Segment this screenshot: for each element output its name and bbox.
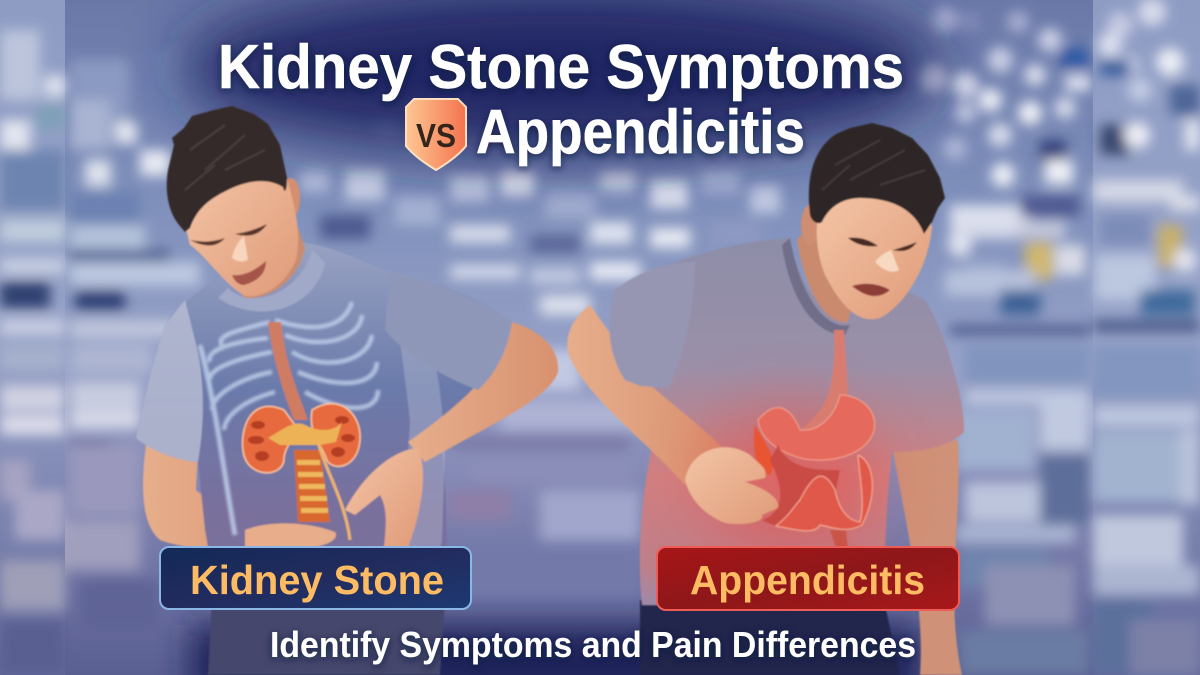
- bent right arm: [408, 318, 558, 462]
- title line 2: Appendicitis: [476, 98, 805, 167]
- person: kidney stone patient: [136, 106, 558, 675]
- shirt highlights: [136, 300, 445, 600]
- left arm: [143, 445, 335, 551]
- subtitle: Identify Symptoms and Pain Differences: [270, 624, 916, 665]
- hair: [809, 123, 945, 234]
- spine band: [268, 322, 308, 420]
- neck: [797, 215, 855, 322]
- face: [185, 169, 298, 296]
- torso shirt: [136, 242, 512, 605]
- right arm: [893, 440, 962, 675]
- forearm: [567, 305, 725, 485]
- colon and appendix: [754, 425, 872, 548]
- neck: [228, 205, 305, 298]
- sleeve: [385, 272, 512, 390]
- label: appendicitis: Appendicitis: [690, 557, 925, 603]
- trousers: [640, 600, 900, 675]
- collar: [782, 238, 850, 335]
- eyes, nose, mouth: [190, 224, 267, 285]
- red pain glow: [700, 405, 880, 555]
- oesophagus: [800, 330, 848, 430]
- hair strands: [185, 125, 265, 190]
- person: appendicitis patient: [567, 123, 964, 675]
- label: appendicitis: [657, 547, 959, 610]
- label: kidney stone: Kidney Stone: [190, 557, 444, 603]
- hand on flank: [345, 448, 423, 548]
- hair: [167, 106, 287, 232]
- kidneys and ureters: [242, 404, 360, 540]
- ear: [282, 178, 300, 218]
- hair strands: [822, 140, 925, 190]
- icon: vs shield badge: [406, 99, 466, 170]
- face: [817, 197, 932, 319]
- title backdrop glow: [180, 0, 940, 155]
- left side strip: [0, 0, 65, 675]
- label: kidney stone: [160, 547, 471, 609]
- stomach: [758, 395, 875, 460]
- lower shirt and trousers: [208, 600, 445, 675]
- nose: [875, 250, 899, 272]
- title line 1: Kidney Stone Symptoms: [218, 33, 904, 102]
- sleeve: [609, 262, 695, 388]
- mouth: [852, 284, 890, 296]
- ear: [801, 205, 819, 245]
- lower hand on kidney side: [245, 523, 336, 549]
- bottom dark band: [190, 625, 920, 675]
- title: [218, 33, 904, 167]
- shirt collar: [218, 250, 325, 311]
- ribcage overlay: [200, 302, 378, 535]
- hand on abdomen: [685, 447, 778, 524]
- torso shirt: [610, 238, 964, 605]
- brows and eyes: [848, 238, 878, 246]
- right side strip: [1093, 0, 1200, 675]
- icon: vs shield badge: VS: [416, 117, 456, 154]
